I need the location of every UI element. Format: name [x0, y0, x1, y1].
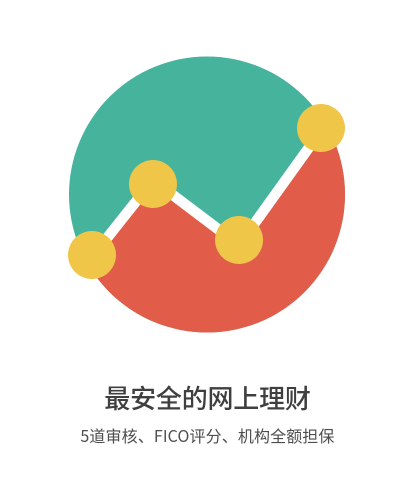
- green circle background: [69, 56, 345, 332]
- yellow data point 3: [215, 216, 263, 264]
- yellow data point 1: [68, 231, 116, 279]
- title: 最安全的网上理财: [104, 379, 311, 416]
- yellow data point 2: [129, 160, 177, 208]
- icon: line chart in circle: [68, 56, 345, 332]
- yellow data point 4: [297, 104, 345, 152]
- subtitle: 5道审核、FICO评分、机构全额担保: [80, 423, 335, 447]
- white trend line: [92, 128, 323, 257]
- red area below the line: [97, 146, 345, 332]
